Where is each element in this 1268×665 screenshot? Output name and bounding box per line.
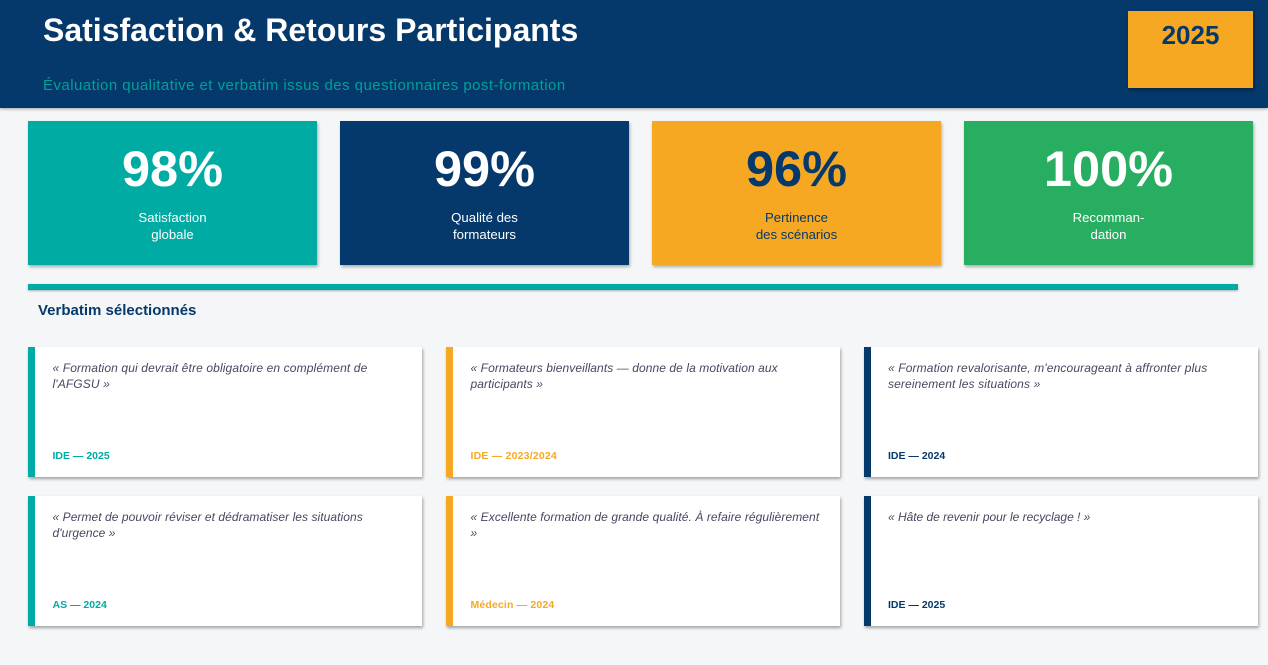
panel: KPI recommandation: Recomman-	[1073, 210, 1144, 225]
panel: KPI pertinence des scénarios	[652, 121, 941, 265]
card: verbatim 1: IDE — 2025	[52, 450, 110, 462]
panel: KPI qualité des formateurs	[340, 121, 629, 265]
year badge	[1128, 11, 1253, 88]
year badge: 2025	[1162, 20, 1219, 50]
panel: KPI pertinence des scénarios: Pertinence	[765, 210, 828, 225]
panel: KPI qualité des formateurs: formateurs	[453, 227, 516, 242]
panel: KPI satisfaction globale: 98%	[122, 140, 223, 197]
card: verbatim 2: IDE — 2023/2024	[470, 450, 557, 462]
card: verbatim 5: « Excellente formation de grande qualité. À refaire régulièrement	[470, 510, 819, 524]
card: verbatim 6: IDE — 2025	[888, 599, 945, 611]
card: verbatim 1: l'AFGSU »	[52, 377, 110, 391]
panel: KPI satisfaction globale: globale	[151, 227, 194, 242]
section heading: Verbatim sélectionnés	[38, 302, 196, 319]
header band	[0, 0, 1268, 108]
card: verbatim 2	[446, 347, 840, 477]
card: verbatim 3: IDE — 2024	[888, 450, 945, 462]
card: verbatim 4: AS — 2024	[52, 599, 107, 611]
panel: KPI recommandation: dation	[1091, 227, 1126, 242]
panel: KPI recommandation	[964, 121, 1253, 265]
panel: KPI qualité des formateurs: 99%	[434, 140, 535, 197]
panel: KPI qualité des formateurs: Qualité des	[451, 210, 518, 225]
card: verbatim 3	[864, 347, 1258, 477]
card: verbatim 6: « Hâte de revenir pour le recyclage ! »	[888, 510, 1090, 524]
card: verbatim 4: « Permet de pouvoir réviser et dédramatiser les situations	[52, 510, 363, 524]
card: verbatim 4	[28, 496, 422, 626]
section divider bar	[28, 284, 1238, 290]
card: verbatim 1: « Formation qui devrait être obligatoire en complément de	[52, 361, 367, 375]
panel: KPI pertinence des scénarios: des scénarios	[756, 227, 837, 242]
card: verbatim 2: « Formateurs bienveillants — donne de la motivation aux	[470, 361, 778, 375]
card: verbatim 5: »	[470, 526, 477, 540]
card: verbatim 3: sereinement les situations »	[888, 377, 1040, 391]
card: verbatim 3: « Formation revalorisante, m'encourageant à affronter plus	[888, 361, 1207, 375]
card: verbatim 6	[864, 496, 1258, 626]
card: verbatim 5: Médecin — 2024	[470, 599, 554, 611]
card: verbatim 1	[28, 347, 422, 477]
card: verbatim 4: d'urgence »	[52, 526, 116, 540]
panel: KPI pertinence des scénarios: 96%	[746, 140, 847, 197]
card: verbatim 5	[446, 496, 840, 626]
title: Satisfaction & Retours Participants	[43, 12, 578, 48]
panel: KPI recommandation: 100%	[1044, 140, 1173, 197]
card: verbatim 2: participants »	[470, 377, 543, 391]
panel: KPI satisfaction globale: Satisfaction	[138, 210, 207, 225]
subtitle: Évaluation qualitative et verbatim issus des questionnaires post-formation	[43, 77, 566, 94]
panel: KPI satisfaction globale	[28, 121, 317, 265]
